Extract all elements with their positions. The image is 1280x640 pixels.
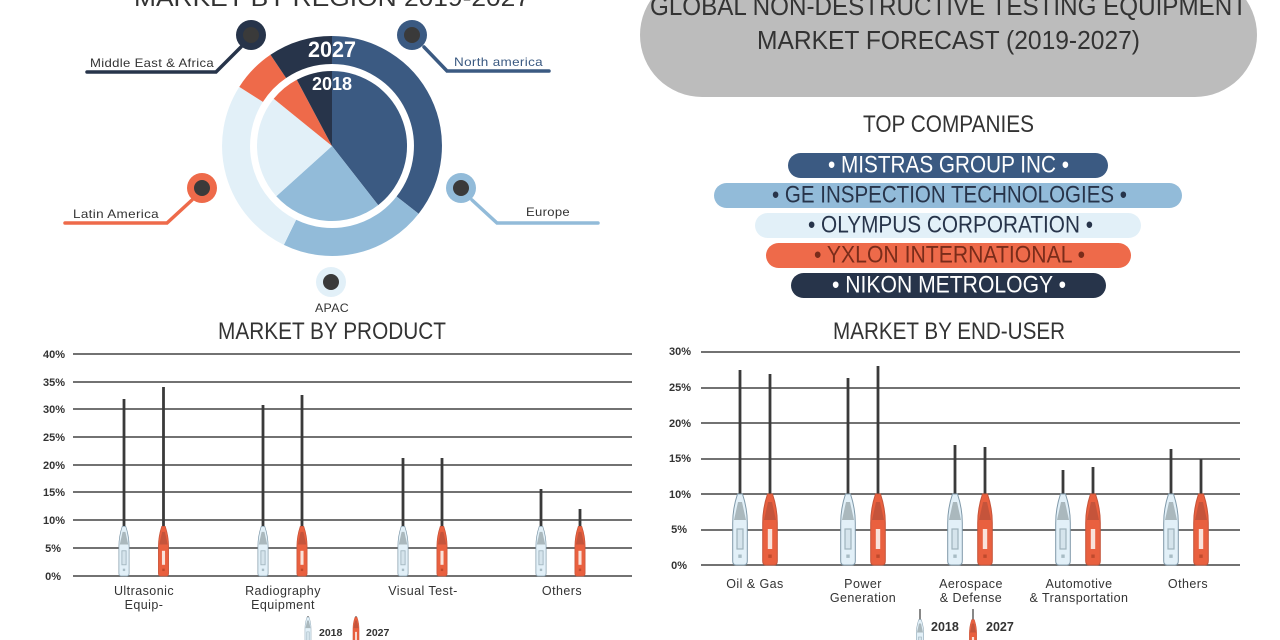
legend: end-user chart: 2027 (986, 620, 1014, 634)
company: mistras: • MISTRAS GROUP INC • (828, 152, 1069, 178)
callout: latin america: Latin America (73, 207, 159, 221)
heading: market by end-user: MARKET BY END-USER (833, 318, 1065, 345)
y axis labels: 30% (669, 346, 691, 358)
y axis labels: 10% (43, 515, 65, 527)
y axis labels: 0% (671, 560, 687, 572)
y axis labels: 25% (43, 432, 65, 444)
category labels: Aerospace (939, 577, 1003, 591)
callout: europe: Europe (526, 205, 570, 219)
heading: market by product: MARKET BY PRODUCT (218, 318, 446, 345)
y axis labels: 15% (43, 487, 65, 499)
callout: apac (315, 267, 349, 315)
y axis labels (669, 346, 691, 572)
callout: middle east and africa: Middle East & Africa (90, 56, 214, 70)
y axis labels: 35% (43, 377, 65, 389)
category labels: Generation (830, 591, 896, 605)
legend: end-user chart: 2018 (931, 620, 959, 634)
bars: ultrasonic (119, 387, 169, 576)
category labels: Automotive (1045, 577, 1113, 591)
main title (650, 0, 1247, 55)
category labels: Power (844, 577, 882, 591)
main title: MARKET FORECAST (2019-2027) (757, 25, 1140, 55)
bars: visual testing (398, 458, 447, 576)
bars: power generation (841, 366, 885, 565)
bars: others (536, 489, 585, 576)
category labels: Equipment (251, 598, 315, 612)
company: ge inspection: • GE INSPECTION TECHNOLOGIES • (772, 182, 1127, 208)
category labels (114, 584, 582, 612)
y axis labels: 20% (43, 460, 65, 472)
legend: product chart (305, 616, 390, 640)
category labels: Visual Test- (388, 584, 458, 598)
callout: europe (446, 173, 598, 223)
y axis labels (43, 349, 65, 583)
callout: north america (397, 20, 549, 71)
chart: market by end-user (669, 346, 1240, 605)
y axis labels: 25% (669, 382, 691, 394)
year label 2018: 2018 (312, 74, 352, 94)
legend: product chart: 2027 (366, 627, 390, 639)
bars: aerospace and defense (948, 445, 992, 565)
bars: oil and gas (733, 370, 777, 565)
company: yxlon: • YXLON INTERNATIONAL • (814, 242, 1085, 268)
callout: apac: APAC (315, 301, 349, 315)
y axis labels: 15% (669, 453, 691, 465)
y axis labels: 20% (669, 418, 691, 430)
outer ring 2027 (236, 50, 428, 242)
donut chart: market by region (236, 37, 428, 242)
callout: middle east and africa (87, 20, 266, 72)
heading: top companies: TOP COMPANIES (863, 111, 1034, 138)
company list (714, 152, 1182, 298)
bars: radiography (258, 395, 307, 576)
callout: north america: North america (454, 55, 543, 69)
category labels: Radiography (245, 584, 321, 598)
y axis labels: 40% (43, 349, 65, 361)
legend: product chart: 2018 (319, 627, 343, 639)
chart: market by product (43, 349, 632, 612)
year label 2027: 2027 (308, 37, 356, 62)
y axis labels: 10% (669, 489, 691, 501)
company: nikon: • NIKON METROLOGY • (832, 272, 1066, 298)
header banner (640, 0, 1257, 97)
category labels: & Defense (940, 591, 1002, 605)
inner pie 2018 (257, 71, 407, 221)
category labels: Others (1168, 577, 1208, 591)
category labels: Oil & Gas (726, 577, 784, 591)
legend: end-user chart (916, 609, 1014, 640)
y axis labels: 5% (671, 524, 687, 536)
category labels: Equip- (125, 598, 163, 612)
category labels: Others (542, 584, 582, 598)
bars: automotive and transportation (1056, 467, 1100, 565)
bars: others (1164, 449, 1208, 565)
category labels: Ultrasonic (114, 584, 174, 598)
y axis labels: 30% (43, 404, 65, 416)
category labels: & Transportation (1030, 591, 1128, 605)
y axis labels: 5% (45, 543, 61, 555)
category labels (726, 577, 1208, 605)
company: olympus: • OLYMPUS CORPORATION • (808, 212, 1093, 238)
y axis labels: 0% (45, 571, 61, 583)
callout: latin america (65, 173, 217, 223)
